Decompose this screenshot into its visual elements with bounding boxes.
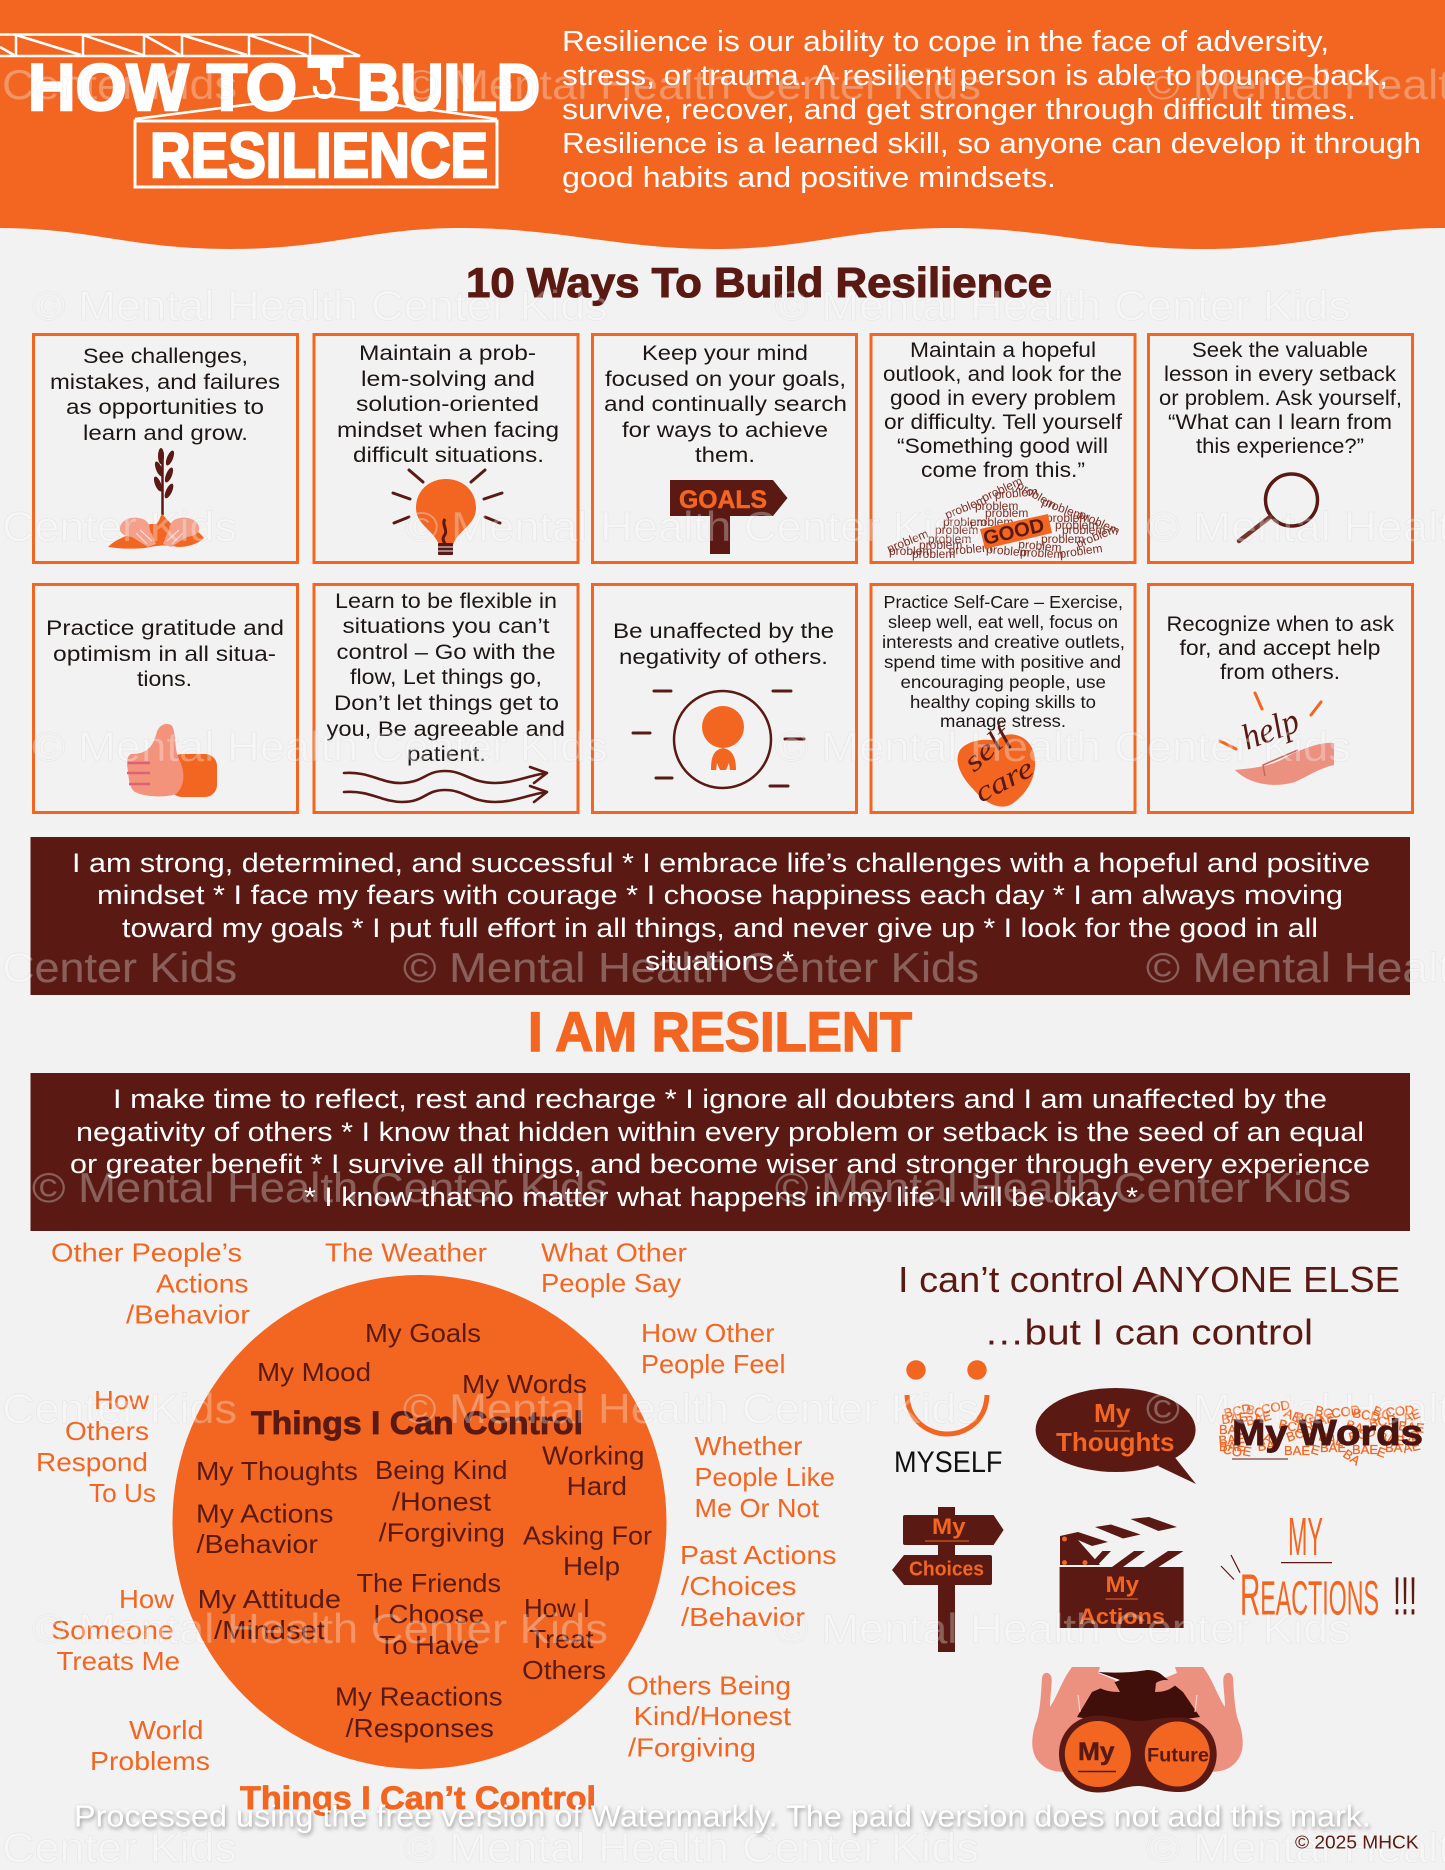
icon: my words letters: AE (1401, 1406, 1423, 1426)
watermark: mental health center kids: © Mental Healt (1146, 503, 1445, 550)
icon: my words letters: BAE (1219, 1422, 1245, 1437)
watermark: mental health center kids: © Mental Health Center Kids (32, 1605, 608, 1652)
heading: I am resilent: I AM RESILENT (528, 1000, 912, 1063)
circle: things I can control: To Have (378, 1630, 479, 1660)
card 9 text (882, 592, 1125, 731)
watermark: mental health center kids: Center Kids (2, 1824, 237, 1870)
labels: things I can't control: How (94, 1385, 149, 1415)
circle: things I can control: My Attitude (198, 1584, 341, 1614)
icon: magnifying glass (1239, 474, 1318, 541)
watermark: mental health center kids: Center Kids (2, 61, 237, 108)
icon: problem pile with good: problem (1041, 532, 1084, 546)
icon: my thoughts bubble (1036, 1388, 1196, 1484)
labels: things I can't control: To Us (89, 1478, 156, 1508)
card 5 text: “What can I learn from (1168, 411, 1392, 434)
icon: problem pile with good: problem (935, 523, 978, 537)
icon: problem pile with good: GOOD (981, 514, 1047, 550)
watermark: mental health center kids: © Mental Healt (1146, 944, 1445, 991)
watermark: mental health center kids: © Mental Health Center Kids (403, 944, 979, 991)
labels: things I can't control: The Weather (325, 1238, 487, 1268)
intro paragraph: Resilience is our ability to cope in the face of adversity, (562, 26, 1329, 58)
icon: my words letters: BAE (1308, 1410, 1336, 1430)
icon: my words letters: BAE (1377, 1429, 1406, 1449)
card 7 text: you, Be agreeable and (326, 718, 565, 741)
circle: things I can control: /Forgiving (379, 1518, 505, 1548)
heading: things I can't control: Things I Can’t Control (240, 1780, 596, 1816)
watermark: mental health center kids: © Mental Health Center Kids (405, 61, 981, 108)
icon: problem pile with good: problem (1062, 523, 1105, 537)
icon: problem pile with good: problem (1077, 507, 1122, 538)
card 3 text: focused on your goals, (605, 368, 846, 391)
title words (28, 50, 540, 191)
watermark: mental health center kids: © Mental Health Center Kids (32, 723, 608, 770)
card 7 text: flow, Let things go, (350, 666, 542, 689)
labels: things I can't control: People Feel (641, 1349, 786, 1379)
icon: my words letters: COD (1260, 1397, 1291, 1417)
affirmation banner 1: toward my goals * I put full effort in all things, and never give up * I look for the good in all (122, 913, 1318, 943)
card 9 text: encouraging people, use (900, 672, 1106, 692)
icon: myself smiley (894, 1360, 1002, 1479)
card 3 text: them. (695, 444, 755, 467)
card 2 text: mindset when facing (337, 419, 559, 442)
icon: problem pile with good: problem (970, 515, 1013, 529)
card 7 text: patient. (407, 743, 486, 766)
icon: my words letters: E (1309, 1441, 1322, 1458)
icon: my words letters: BC (1371, 1403, 1393, 1423)
lenses (1059, 1716, 1217, 1792)
circle: things I can control: /Responses (346, 1713, 494, 1743)
circle: things I can control: Hard (567, 1471, 627, 1501)
watermark: mental health center kids: Center Kids (2, 1385, 237, 1432)
icon: wavy arrows (344, 767, 547, 802)
icon: my choices signpost: My (932, 1514, 966, 1539)
affirmation banner 2: or greater benefit * I survive all things, and become wiser and stronger through every experience (70, 1149, 1370, 1179)
icon: my reactions lettering: !!! (1393, 1566, 1417, 1626)
icon: my words letters: CD (1400, 1428, 1421, 1445)
icon: self care heart: self (957, 716, 1021, 778)
labels: things I can't control: People Say (541, 1268, 681, 1298)
circle: things I can control: My Goals (365, 1318, 481, 1348)
card 3 text: Keep your mind (642, 342, 808, 365)
icon: my words letters: BC (1244, 1401, 1266, 1421)
watermark: mental health center kids: © Mental Health Center Kids (775, 723, 1351, 770)
watermark: mental health center kids: Center Kids (2, 503, 237, 550)
card 2 text: solution-oriented (356, 393, 539, 416)
title words: RESILIENCE (150, 121, 488, 191)
icon: problem pile with good: problem (1020, 545, 1064, 561)
icon: my words letters: AE (1402, 1438, 1422, 1456)
card 5 text: lesson in every setback (1164, 363, 1397, 386)
icon: problem pile with good: problem (979, 474, 1025, 505)
watermark: mental health center kids: © Mental Healt (1146, 61, 1445, 108)
icon: my choices signpost (892, 1507, 1004, 1652)
card 8 text (613, 620, 834, 669)
watermark: mental health center kids: © Mental Health Center Kids (403, 1824, 979, 1870)
card 3 text (604, 342, 847, 467)
labels: things I can't control: Problems (90, 1746, 210, 1776)
circle: things I can control: Things I Can Control (251, 1405, 583, 1441)
card 9 text: spend time with positive and (884, 652, 1121, 672)
icon: problem pile with good: problem (1074, 522, 1119, 551)
card 10 text (1166, 613, 1395, 684)
icon: my words letters: COD (1385, 1402, 1415, 1420)
icon: my words letters: BAE (1218, 1431, 1246, 1448)
watermark: mental health center kids: © Mental Health Center Kids (403, 1385, 979, 1432)
icon: light bulb (393, 470, 502, 555)
card 9 text: sleep well, eat well, focus on (888, 612, 1118, 632)
icon: my words letters: BCD (1347, 1423, 1377, 1445)
icon: my future binoculars: Future (1147, 1746, 1209, 1766)
icon: problem pile with good: problem (994, 484, 1038, 502)
icon: problem pile with good: problem (1014, 478, 1059, 512)
icon: my words letters: BCD (1295, 1409, 1324, 1428)
card 8 text: Be unaffected by the (613, 620, 834, 643)
copyright: © 2025 MHCK (1295, 1833, 1419, 1853)
card 10 text: from others. (1220, 661, 1340, 684)
icon: goals signpost (670, 480, 788, 554)
card 9 text: healthy coping skills to (910, 692, 1096, 712)
icon: my words letters: BA (1385, 1440, 1403, 1455)
icon: problem pile with good: problem (889, 544, 932, 558)
icon: self care heart: care (969, 752, 1039, 809)
card 1 text: as opportunities to (66, 396, 264, 419)
labels: things I can't control: /Choices (681, 1571, 796, 1601)
card 7 text (326, 590, 565, 766)
header band (0, 0, 1445, 249)
icon: problem pile with good: problem (912, 547, 955, 561)
circle: things I can control: Help (563, 1551, 620, 1581)
card 10 text: for, and accept help (1180, 637, 1380, 660)
circle: things I can control: The Friends (356, 1568, 501, 1598)
card 7 text: situations you can’t (342, 615, 550, 638)
card 1 text (50, 345, 280, 445)
circle: things I can control: Treat (529, 1624, 594, 1654)
card 9 text: interests and creative outlets, (882, 632, 1125, 652)
icon: goals signpost: GOALS (679, 486, 767, 514)
icon: my words letters: BAE (1320, 1440, 1346, 1455)
labels: things I can't control: /Forgiving (628, 1732, 756, 1762)
icon: problem pile with good: problem (928, 532, 971, 546)
icon: problem pile with good: problem (943, 515, 986, 529)
icon: problem pile with good: problem (885, 527, 930, 556)
icon: my words letters: BAE (1352, 1442, 1378, 1457)
affirmation banner 2: * I know that no matter what happens in my life I will be okay * (304, 1182, 1139, 1212)
heading: I can't control anyone else: …but I can control (984, 1312, 1313, 1352)
circle: things I can control: /Mindset (214, 1615, 326, 1645)
card 3 text: and continually search (604, 393, 847, 416)
card 2 text (337, 342, 559, 467)
card 5 text (1159, 339, 1402, 458)
card 4 text: Maintain a hopeful (910, 339, 1096, 362)
icon: helping hand: help (1236, 700, 1304, 758)
icon: my words letters: BAE (1317, 1428, 1347, 1450)
intro paragraph: stress, or trauma. A resilient person is able to bounce back, (562, 60, 1388, 92)
icon: my words letters: My Words (1232, 1412, 1423, 1453)
card 6 text: Practice gratitude and (46, 617, 284, 640)
icon: problem pile with good: problem (986, 542, 1030, 560)
icon: my words letters: BAE (1219, 1439, 1245, 1454)
watermarkly notice: Processed using the free version of Watermarkly. The paid version does not add this mark. (74, 1798, 1371, 1834)
icon: my words letters: BAE (1244, 1408, 1273, 1429)
icon: my words letters (1218, 1397, 1425, 1469)
card 2 text: difficult situations. (353, 444, 544, 467)
icon: problem pile with good: problem (985, 506, 1028, 520)
card 5 text: Seek the valuable (1192, 339, 1368, 362)
control circle diagram (36, 1238, 836, 1816)
watermark: mental health center kids: © Mental Health Center Kids (775, 282, 1351, 329)
card 8 text: negativity of others. (619, 646, 828, 669)
watermark: mental health center kids: © Mental Health Center Kids (32, 1164, 608, 1211)
affirmation banner 2: negativity of others * I know that hidden within every problem or setback is the seed of an equal (76, 1117, 1364, 1147)
card 6: gratitude (34, 584, 298, 812)
card 2 text: lem-solving and (361, 368, 535, 391)
icon: thumbs up (127, 724, 217, 797)
card 9 text: manage stress. (940, 711, 1066, 731)
intro paragraph: survive, recover, and get stronger through difficult times. (562, 94, 1356, 126)
affirmation banner 1: I am strong, determined, and successful * I embrace life’s challenges with a hopeful and positive (72, 848, 1370, 878)
affirmation banner 2 (30, 1073, 1410, 1231)
title with crane graphic (0, 34, 540, 191)
icon: my words letters: BAE (1398, 1418, 1425, 1436)
circle: things I can control: Working (542, 1441, 644, 1471)
icon: my words letters: BAE (1221, 1409, 1249, 1427)
icon: my words letters: BCD (1277, 1416, 1307, 1437)
labels: things I can't control: How Other (641, 1318, 775, 1348)
icon: my words letters: COD (1330, 1402, 1361, 1421)
title words: HOW TO (28, 50, 297, 124)
icon: problem pile with good: problem (1040, 495, 1086, 523)
card 4 text: outlook, and look for the (883, 363, 1122, 386)
labels: things I can't control: Other People’s (51, 1238, 242, 1268)
icon: my choices signpost: Choices (909, 1558, 984, 1580)
icon: self care heart (957, 716, 1039, 809)
watermark: mental health center kids: Center Kids (2, 944, 237, 991)
circle: things I can control: My Thoughts (196, 1456, 358, 1486)
icon: problem pile with good: problem (975, 499, 1018, 513)
card 4 text: or difficulty. Tell yourself (884, 411, 1122, 434)
watermark: mental health center kids: © Mental Healt (1146, 1824, 1445, 1870)
icon: my words letters: BA (1257, 1437, 1276, 1454)
labels: things I can't control: People Like (694, 1462, 835, 1492)
circle: things I can control: /Behavior (196, 1529, 318, 1559)
card 5 text: this experience?” (1196, 435, 1364, 458)
icon: my words letters: BAE (1284, 1443, 1310, 1458)
icon: problem pile with good: problem (1046, 511, 1089, 525)
icon: my words letters: BC (1313, 1402, 1335, 1422)
card 1: challenges (34, 334, 298, 562)
card 8: unaffected (592, 584, 856, 812)
icon: problem pile with good: problem (1055, 518, 1098, 532)
watermark: mental health center kids: © Mental Health Center Kids (405, 503, 981, 550)
icon: my words letters: BCD (1351, 1405, 1381, 1425)
icon: my words letters: AE (1282, 1405, 1304, 1426)
icon: my actions clapperboard (1060, 1517, 1184, 1629)
circle: things I can control: My Reactions (335, 1682, 503, 1712)
labels: things I can't control: Actions (156, 1268, 248, 1298)
crane truss and hook (0, 34, 497, 187)
hands (1032, 1667, 1243, 1772)
icon: my thoughts bubble: My (1094, 1398, 1131, 1428)
affirmation banner 1: situations * (645, 946, 795, 976)
watermark: mental health center kids: © Mental Health Center Kids (775, 1605, 1351, 1652)
affirmation banner 2: I make time to reflect, rest and recharge * I ignore all doubters and I am unaffected by the (113, 1084, 1327, 1114)
icon: problem pile with good: problem (1018, 537, 1062, 555)
labels: things I can't control: Others (65, 1416, 149, 1446)
watermark: mental health center kids: © Mental Healt (1146, 1385, 1445, 1432)
card 9 text: Practice Self-Care – Exercise, (884, 592, 1123, 612)
labels: things I can't control: /Behavior (126, 1300, 250, 1330)
circle: things I can control: Asking For (523, 1521, 652, 1551)
circle: things I can control: /Honest (392, 1486, 492, 1516)
card 2: problem solving (314, 334, 578, 562)
icon: my future binoculars: My (1078, 1738, 1115, 1766)
card 5 text: or problem. Ask yourself, (1159, 387, 1402, 410)
labels: things I can't control: Someone (51, 1615, 174, 1645)
card 4 text: good in every problem (890, 387, 1116, 410)
icon: my reactions lettering (1221, 1507, 1417, 1627)
card 6 text: optimism in all situa- (53, 643, 276, 666)
icon: my actions clapperboard: My (1106, 1572, 1140, 1597)
icon: my words letters: BCD (1284, 1422, 1315, 1445)
affirmation banner 1 (30, 837, 1410, 995)
card 7: flexible (314, 584, 578, 812)
card 4: hopeful outlook (871, 334, 1135, 562)
card 7 text: control – Go with the (336, 641, 556, 664)
labels: things I can't control: Past Actions (680, 1540, 836, 1570)
icon: my words letters: BAE (1344, 1417, 1374, 1439)
heading: I can't control anyone else (898, 1259, 1400, 1352)
circle: things I can control: Being Kind (375, 1455, 508, 1485)
icon: my thoughts bubble: Thoughts (1056, 1427, 1174, 1457)
labels: things I can't control (36, 1238, 836, 1776)
affirmation banner 1: mindset * I face my fears with courage * I choose happiness each day * I am always moving (97, 880, 1343, 910)
icon: my words letters: AE (1261, 1430, 1283, 1450)
card 3: goals (592, 334, 856, 562)
labels: things I can't control: /Behavior (681, 1602, 805, 1632)
icon: my words letters: E (1241, 1443, 1253, 1460)
card 7 text: Don’t let things get to (334, 692, 559, 715)
title words: BUILD (357, 50, 540, 124)
icon: myself smiley: MYSELF (894, 1446, 1002, 1479)
card 9: self care (871, 584, 1135, 812)
labels: things I can't control: What Other (541, 1238, 687, 1268)
labels: things I can't control: Whether (694, 1431, 803, 1461)
card 4 text (883, 339, 1122, 482)
circle: things I can control (172, 1275, 666, 1769)
card 5: valuable lesson (1148, 334, 1412, 562)
watermark: mental health center kids: © Mental Health Center Kids (32, 282, 608, 329)
icon: problem pile with good: problem (948, 540, 992, 558)
circle: things I can control: My Actions (196, 1498, 334, 1528)
icon: my words letters: BCD (1368, 1411, 1398, 1431)
icon: my reactions lettering: MY (1288, 1507, 1323, 1567)
heading: 10 ways: 10 Ways To Build Resilience (466, 259, 1052, 306)
labels: things I can't control: Kind/Honest (634, 1701, 792, 1731)
icon: my words letters: CO (1221, 1441, 1244, 1460)
intro paragraph (562, 26, 1421, 194)
labels: things I can't control: Treats Me (56, 1646, 180, 1676)
icon: my words letters: BA (1340, 1446, 1363, 1469)
card 6 text: tions. (137, 668, 192, 691)
labels: things I can't control: Others Being (627, 1671, 791, 1701)
heading: I can't control anyone else: I can’t control ANYONE ELSE (898, 1259, 1400, 1300)
circle: things I can control: I Choose (373, 1599, 484, 1629)
labels: things I can't control: Respond (36, 1447, 148, 1477)
icon: problem pile with good: problem (1058, 541, 1103, 561)
icon: my words letters: E (1375, 1444, 1389, 1461)
card 4 text: come from this.” (921, 459, 1085, 482)
icon: problem pile with good (885, 474, 1122, 561)
icon: person in circle (633, 691, 804, 788)
circle: things I can control: How I (524, 1593, 590, 1623)
card 7 text: Learn to be flexible in (335, 590, 557, 613)
intro paragraph: good habits and positive mindsets. (562, 162, 1056, 194)
labels: things I can't control: Me Or Not (694, 1493, 820, 1523)
card 2 text: Maintain a prob- (359, 342, 536, 365)
card 1 text: learn and grow. (83, 422, 248, 445)
card 1 text: mistakes, and failures (50, 371, 280, 394)
card 10 text: Recognize when to ask (1166, 613, 1395, 636)
icon: problem pile with good: problem (943, 493, 988, 522)
icon: my actions clapperboard: Actions (1079, 1604, 1165, 1629)
icon: my words letters: BCD (1223, 1401, 1252, 1421)
icon: seedling in hands (108, 448, 204, 549)
icon: my future binoculars (1032, 1667, 1243, 1792)
card 3 text: for ways to achieve (622, 419, 828, 442)
card 6 text (46, 617, 284, 691)
card 1 text: See challenges, (83, 345, 248, 368)
card 4 text: “Something good will (897, 435, 1108, 458)
watermark: mental health center kids: © Mental Health Center Kids (775, 1164, 1351, 1211)
card 10: ask for help (1148, 584, 1412, 812)
labels: things I can't control: How (119, 1584, 174, 1614)
icon: helping hand (1220, 693, 1334, 785)
circle: things I can control: My Words (462, 1369, 587, 1399)
circle: things I can control: My Mood (257, 1357, 371, 1387)
intro paragraph: Resilience is a learned skill, so anyone can develop it through (562, 128, 1421, 160)
labels: things I can't control: World (129, 1715, 204, 1745)
icon: problem pile with good: problem (919, 538, 962, 552)
circle: things I can control: Others (522, 1655, 606, 1685)
